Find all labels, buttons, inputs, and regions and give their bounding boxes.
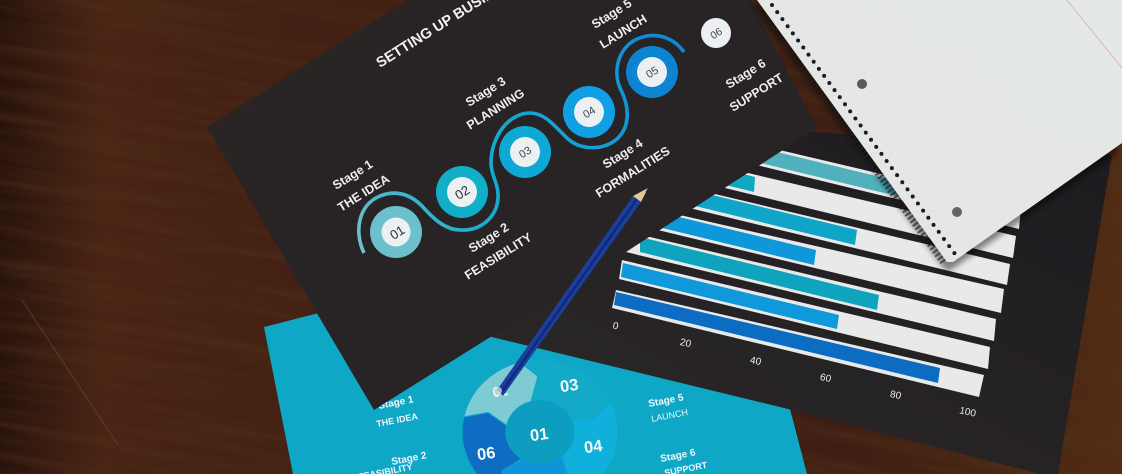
wheel numbers: 02 [491, 382, 509, 400]
stage 03 marker [499, 126, 551, 178]
chart rows [612, 121, 1021, 397]
wheel numbers: 03 [559, 376, 580, 396]
stage labels: FEASIBILITY [462, 230, 535, 283]
chart axis labels: 100 [958, 405, 977, 420]
chart axis labels: 60 [819, 372, 833, 385]
blue paper stage labels: Stage 2 [390, 450, 428, 468]
dark paper: horizontal bar chart [480, 121, 1112, 474]
blue paper stage labels: Stage 1 [377, 394, 415, 412]
stage labels: Stage 1 [330, 157, 375, 193]
chart bars [614, 126, 940, 383]
stage 04 marker: 04 [581, 105, 598, 121]
blue paper stage labels: Stage 6 [659, 447, 697, 465]
black paper: business stages roadmap [207, 0, 817, 410]
chart axis labels: 0 [612, 321, 620, 333]
blue paper stage labels: LAUNCH [650, 407, 689, 424]
blue paper stage labels [357, 392, 709, 474]
stage 06 marker [701, 18, 731, 48]
stage 04 marker [563, 86, 615, 138]
wheel numbers: 01 [529, 425, 550, 445]
stage 05 marker: 05 [644, 65, 661, 81]
spiral holes [772, 5, 955, 254]
stage labels: THE IDEA [335, 172, 392, 215]
stage labels: Stage 2 [466, 220, 511, 256]
stage labels: PLANNING [464, 86, 527, 133]
stage 03 marker: 03 [517, 145, 534, 161]
wheel numbers: 04 [583, 437, 604, 457]
stage 05 marker [626, 46, 678, 98]
stage 02 marker [436, 166, 488, 218]
spiral notebook [750, 0, 1122, 272]
chart axis labels [612, 321, 977, 420]
stage 02 marker: 02 [452, 182, 472, 203]
stage 06 marker: 06 [708, 26, 725, 42]
stage labels: Stage 4 [600, 136, 645, 172]
blue paper stage labels: Stage 5 [647, 392, 685, 410]
wheel numbers: 06 [476, 444, 497, 464]
spiral wire [751, 0, 944, 262]
punch holes [857, 79, 962, 217]
pencil [494, 188, 648, 396]
chart axis labels: 80 [889, 389, 903, 402]
margin line [1067, 0, 1122, 68]
blue paper stage labels: THE IDEA [375, 411, 419, 429]
chart axis labels: 20 [679, 337, 693, 350]
stage 01 marker: 01 [387, 222, 407, 243]
blue paper: stage wheel [264, 313, 807, 474]
stage labels: SUPPORT [727, 70, 786, 115]
wave path [359, 35, 684, 253]
notebook page [757, 0, 1122, 262]
stage labels: Stage 6 [723, 56, 768, 92]
wheel numbers [476, 376, 604, 464]
stage labels: Stage 3 [463, 74, 508, 110]
stage labels [330, 0, 786, 283]
chart axis labels: 40 [749, 355, 763, 368]
stage labels: LAUNCH [597, 12, 649, 52]
stage 01 marker [370, 206, 422, 258]
wheel diagram [462, 359, 618, 474]
stage labels: FORMALITIES [593, 144, 672, 201]
